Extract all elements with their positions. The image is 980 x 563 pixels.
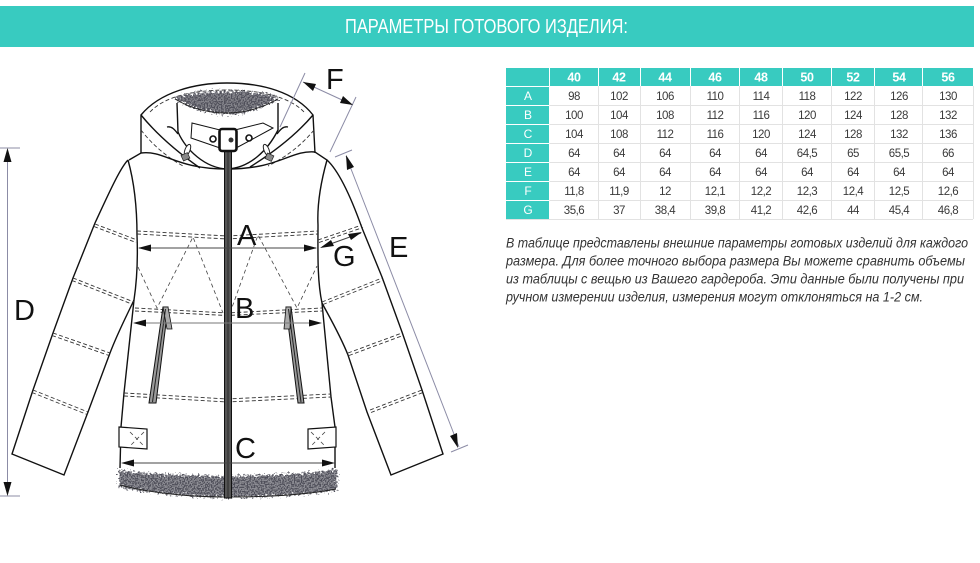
row E values	[568, 167, 955, 179]
row F values: 12,2	[751, 186, 771, 198]
row G values: 39,8	[705, 205, 725, 217]
table header row: 46	[708, 70, 722, 84]
table header row: 44	[658, 70, 672, 84]
row F values: 12,3	[797, 186, 817, 198]
row A values: 122	[844, 91, 862, 103]
row D values: 64,5	[797, 148, 817, 160]
row F values: 12,1	[705, 186, 725, 198]
row A values: 130	[939, 91, 957, 103]
row C values: 104	[565, 129, 584, 141]
table row labels: C	[524, 127, 533, 141]
row B values: 108	[656, 110, 674, 122]
table row labels: D	[524, 146, 533, 160]
centre zipper	[224, 150, 232, 498]
dimension D: D	[14, 295, 35, 327]
table row labels: G	[523, 203, 533, 217]
row C values: 128	[844, 129, 862, 141]
row G values: 42,6	[797, 205, 817, 217]
row B values: 124	[844, 110, 863, 122]
row E values: 64	[801, 167, 814, 179]
collar strap	[191, 123, 273, 148]
table header row: 50	[800, 70, 814, 84]
hood drawcord toggles	[181, 144, 274, 161]
dimension B: B	[235, 293, 254, 325]
row G values: 45,4	[889, 205, 910, 217]
row B values: 116	[753, 110, 770, 122]
row B values: 100	[565, 110, 583, 122]
row G values: 41,2	[751, 205, 771, 217]
table row labels: A	[524, 89, 532, 103]
row B values: 120	[798, 110, 816, 122]
row B values: 128	[890, 110, 908, 122]
jacket body outline	[120, 152, 335, 468]
row D values: 64	[709, 148, 722, 160]
row C values: 112	[657, 129, 674, 141]
dimension C	[121, 433, 335, 466]
row A values: 106	[656, 91, 674, 103]
table header row: 56	[941, 70, 955, 84]
table row labels	[506, 87, 549, 219]
dimension A	[138, 220, 317, 252]
row G values: 46,8	[938, 205, 958, 217]
row A values: 114	[753, 91, 771, 103]
row G values: 44	[847, 205, 860, 217]
row D values: 65,5	[889, 148, 909, 160]
table grid	[506, 86, 974, 220]
row A values: 118	[799, 91, 816, 103]
row E values: 64	[659, 167, 672, 179]
explanatory paragraph: из таблицы с вещью из Вашего гардероба. Эти данные были получены при	[506, 272, 964, 286]
row F values	[564, 186, 958, 198]
buckle	[220, 129, 236, 151]
row D values: 64	[568, 148, 581, 160]
row F values: 12,6	[938, 186, 958, 198]
hood fur trim	[174, 91, 279, 114]
row A values: 98	[568, 91, 580, 103]
dimension F	[280, 64, 356, 152]
row C values: 116	[707, 129, 724, 141]
row C values: 136	[939, 129, 957, 141]
table header row	[506, 68, 973, 86]
row D values: 65	[847, 148, 859, 160]
row A values	[568, 91, 957, 103]
explanatory paragraph	[505, 236, 968, 304]
row C values: 108	[610, 129, 628, 141]
row C values: 124	[798, 129, 817, 141]
right cuff tab	[308, 427, 336, 449]
table header row: 52	[846, 70, 860, 84]
row F values: 12	[659, 186, 671, 198]
row E values: 64	[755, 167, 768, 179]
row F values: 11,9	[609, 186, 629, 198]
right zip pocket	[284, 307, 304, 403]
left sleeve	[12, 160, 134, 475]
row C values: 132	[890, 129, 908, 141]
table header row: 54	[892, 70, 906, 84]
row E values: 64	[568, 167, 581, 179]
row B values: 112	[707, 110, 724, 122]
dimension G	[320, 232, 362, 273]
left cuff tab	[119, 427, 147, 449]
header banner	[0, 6, 974, 47]
row F values: 12,4	[843, 186, 864, 198]
row E values: 64	[942, 167, 955, 179]
size table	[506, 68, 974, 220]
row E values: 64	[709, 167, 722, 179]
row E values: 64	[893, 167, 906, 179]
row E values: 64	[847, 167, 860, 179]
row B values	[565, 110, 957, 122]
dimension A: A	[237, 220, 257, 252]
row B values: 132	[939, 110, 957, 122]
table header row: 40	[567, 70, 581, 84]
dimension C: C	[235, 433, 256, 465]
row G values: 35,6	[564, 205, 584, 217]
dimension G: G	[333, 241, 356, 273]
row F values: 12,5	[889, 186, 909, 198]
row D values: 64	[659, 148, 672, 160]
dimension D	[0, 148, 35, 496]
dimension E	[335, 150, 468, 452]
row C values	[565, 129, 957, 141]
explanatory paragraph: ручном измерении изделия, измерения могут отклоняться на 1-2 см.	[505, 290, 923, 304]
left zip pocket	[149, 307, 172, 403]
hood	[141, 83, 315, 169]
explanatory paragraph: размера. Для более точного выбора размера Вы можете сравнить объемы	[505, 254, 965, 268]
dimension F: F	[326, 64, 344, 96]
row D values: 64	[613, 148, 626, 160]
row B values: 104	[610, 110, 629, 122]
table header row: 48	[754, 70, 768, 84]
jacket technical drawing	[12, 83, 443, 498]
title: ПАРАМЕТРЫ ГОТОВОГО ИЗДЕЛИЯ:	[345, 15, 628, 38]
row A values: 126	[890, 91, 908, 103]
row A values: 102	[610, 91, 628, 103]
row G values: 38,4	[655, 205, 676, 217]
table row labels: F	[524, 184, 532, 198]
right sleeve	[322, 160, 443, 475]
dimension B	[133, 293, 322, 326]
table row labels: E	[524, 165, 532, 179]
table header row: 42	[612, 70, 626, 84]
hem fur trim	[119, 469, 337, 497]
row A values: 110	[707, 91, 724, 103]
row D values: 64	[755, 148, 768, 160]
quilting seams	[32, 224, 423, 414]
row D values: 66	[942, 148, 954, 160]
table row labels: B	[524, 108, 532, 122]
row D values	[568, 148, 954, 160]
row F values: 11,8	[564, 186, 584, 198]
row G values	[564, 205, 958, 217]
row C values: 120	[752, 129, 770, 141]
row G values: 37	[613, 205, 625, 217]
dimension E: E	[389, 232, 408, 264]
row E values: 64	[613, 167, 626, 179]
